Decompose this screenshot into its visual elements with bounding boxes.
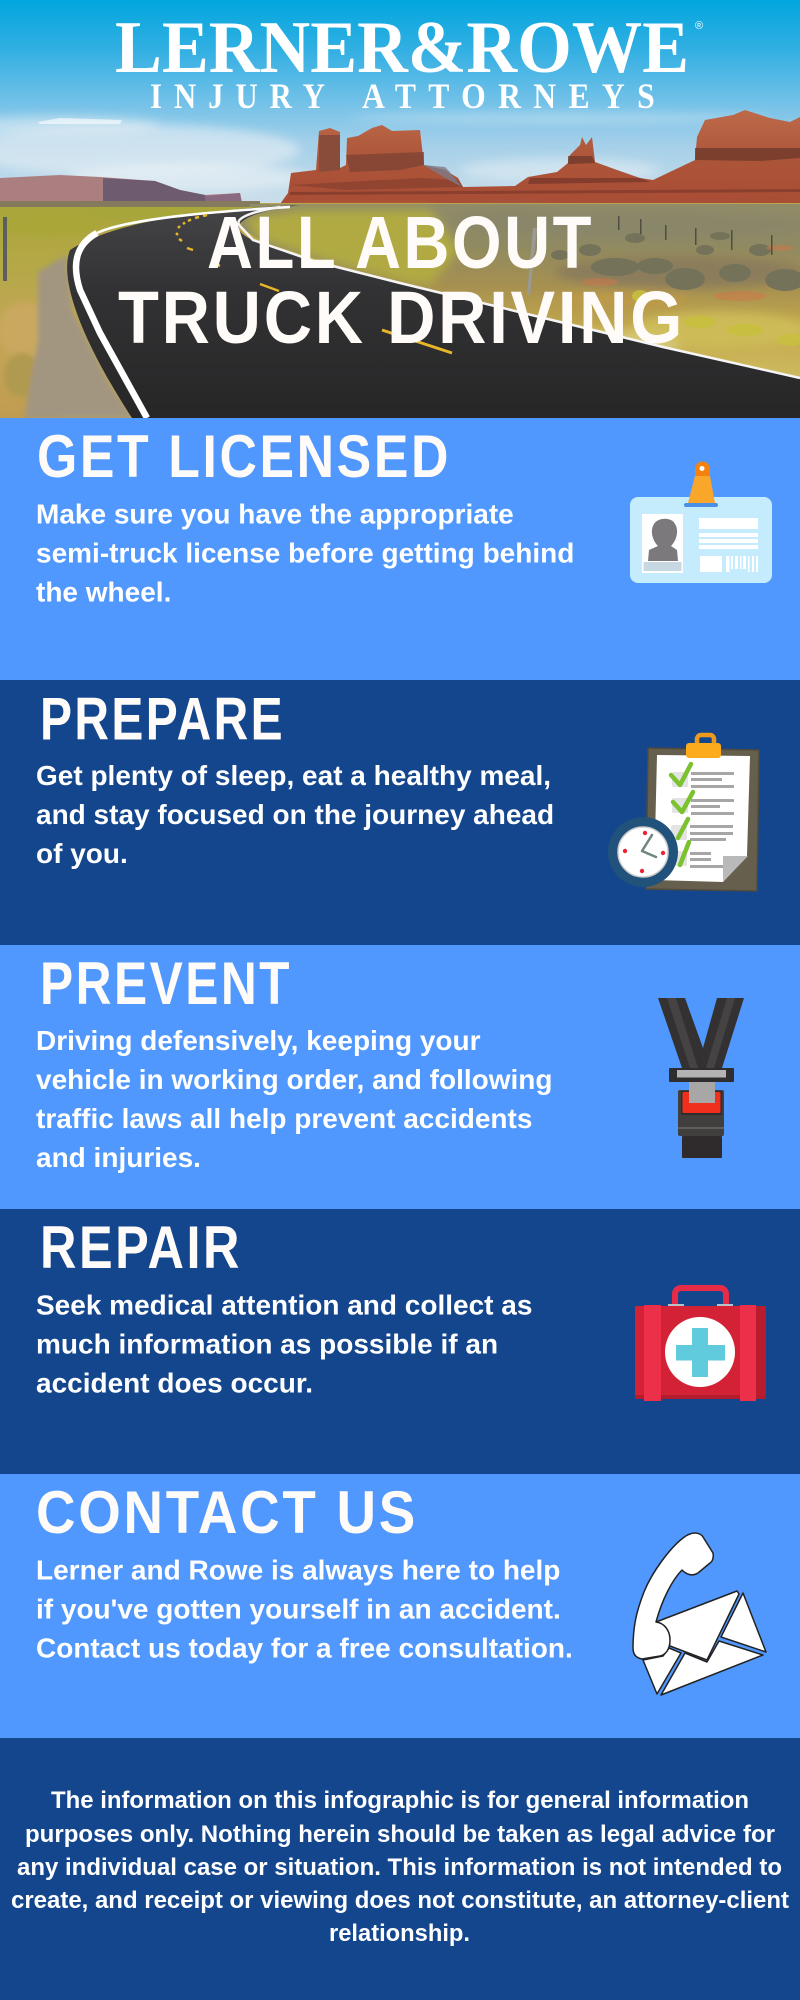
icon: first aid kit — [635, 1288, 766, 1401]
icon: seat belt — [658, 998, 744, 1158]
panel: prevent — [0, 945, 800, 1209]
text: get licensed: Make sure you have the appropriate — [36, 498, 514, 530]
text: prepare: and stay focused on the journey ahead — [36, 799, 554, 830]
panel: contact us — [0, 1474, 800, 1738]
panel: repair — [0, 1209, 800, 1474]
left mesa — [0, 175, 242, 203]
logo: ATTORNEYS — [362, 76, 667, 116]
text: get licensed: semi-truck license before getting behind — [36, 538, 574, 568]
panel: disclaimer — [0, 1738, 800, 2000]
text: prevent — [36, 1025, 553, 1173]
text: disclaimer: The information on this infographic is for general information — [51, 1787, 749, 1814]
title — [118, 201, 685, 359]
text: get licensed: the wheel. — [36, 576, 171, 608]
heading: prepare: PREPARE — [40, 686, 285, 752]
text: get licensed — [36, 498, 574, 608]
text: repair: Seek medical attention and collect as — [36, 1290, 532, 1320]
header photo: desert highway — [0, 0, 800, 418]
icon: phone and envelope — [633, 1533, 766, 1695]
text: repair — [36, 1290, 532, 1398]
logo: LERNER&ROWE — [115, 7, 689, 89]
icon: ID badge — [630, 462, 772, 583]
text: disclaimer: create, and receipt or viewing does not constitute, an attorney-client — [11, 1887, 789, 1914]
title: ALL ABOUT — [207, 201, 594, 284]
icon: clipboard and clock — [608, 735, 759, 891]
text: prepare: of you. — [36, 838, 128, 869]
logo: INJURY — [150, 76, 337, 116]
centre and right mesas — [280, 110, 800, 204]
panel: prepare — [0, 680, 800, 945]
text: disclaimer: relationship. — [329, 1920, 470, 1947]
logo: ® — [695, 20, 703, 32]
text: disclaimer — [11, 1787, 789, 1947]
road — [67, 205, 800, 418]
ground base — [0, 203, 800, 418]
heading: prevent: PREVENT — [40, 950, 292, 1017]
text: prevent: Driving defensively, keeping your — [36, 1025, 481, 1056]
text: disclaimer: any individual case or situation. This information is not intended to — [17, 1854, 782, 1881]
text: prepare: Get plenty of sleep, eat a healthy meal, — [36, 760, 551, 791]
text: prevent: vehicle in working order, and following — [36, 1064, 553, 1095]
heading: repair: REPAIR — [40, 1214, 242, 1281]
shrubs — [551, 232, 800, 291]
text: contact us: if you've gotten yourself in an accident. — [36, 1594, 561, 1624]
text: repair: accident does occur. — [36, 1368, 313, 1398]
heading: contact us: CONTACT US — [36, 1479, 418, 1546]
heading: get licensed: GET LICENSED — [37, 423, 451, 490]
text: contact us — [36, 1554, 573, 1664]
text: prevent: and injuries. — [36, 1142, 201, 1173]
title: TRUCK DRIVING — [118, 276, 685, 359]
roadside post — [527, 228, 537, 295]
left verge — [0, 207, 260, 418]
text: contact us: Lerner and Rowe is always here to help — [36, 1554, 560, 1586]
text: contact us: Contact us today for a free consultation. — [36, 1632, 573, 1664]
text: prepare — [36, 760, 554, 869]
text: disclaimer: purposes only. Nothing herein should be taken as legal advice for — [25, 1821, 775, 1848]
panel: get licensed — [0, 418, 800, 680]
text: repair: much information as possible if an — [36, 1328, 498, 1360]
text: prevent: traffic laws all help prevent accidents — [36, 1103, 532, 1134]
